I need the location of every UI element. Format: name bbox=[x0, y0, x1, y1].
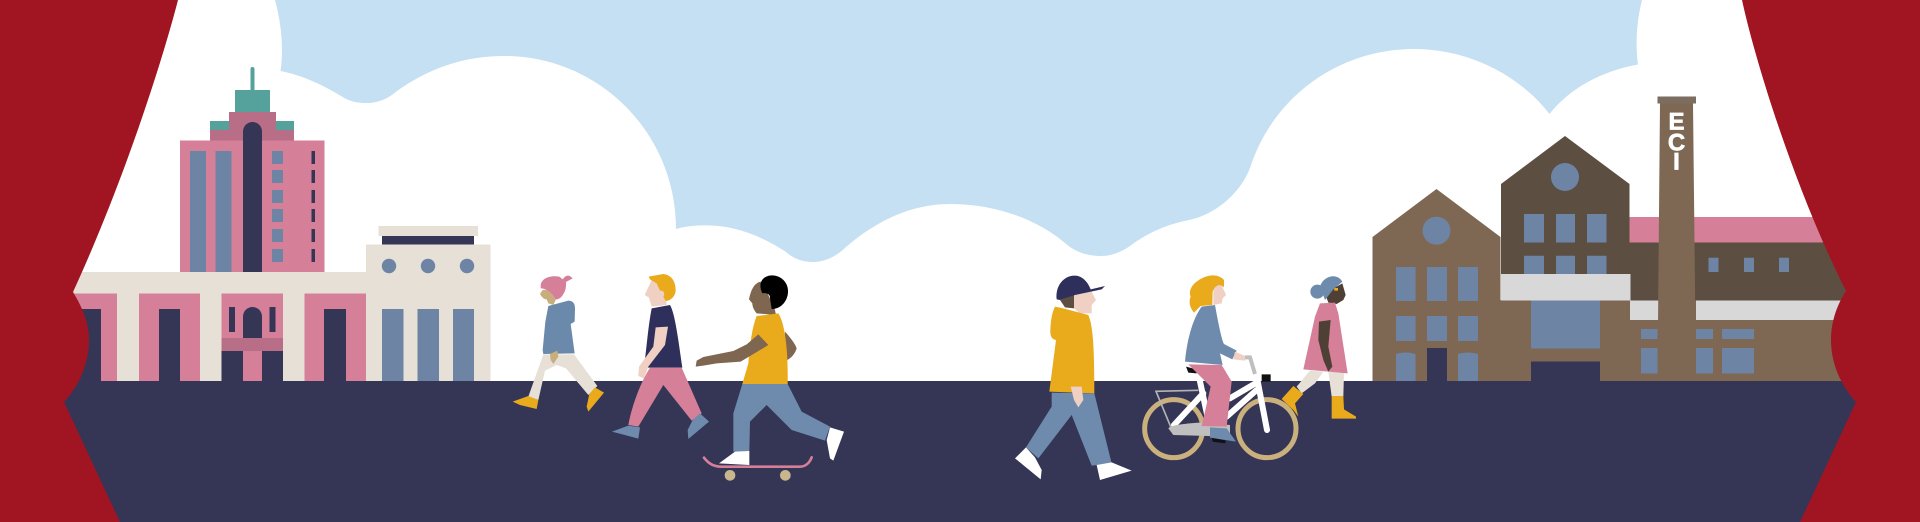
annex bbox=[366, 226, 490, 381]
curtain: right bbox=[1742, 0, 1920, 522]
rider bbox=[1185, 275, 1245, 442]
person: child with pink hair bbox=[513, 276, 604, 412]
chimney lettering: C bbox=[1668, 130, 1685, 156]
chimney lettering bbox=[1668, 108, 1685, 176]
person: walker in cap and yellow hoodie bbox=[1015, 276, 1132, 480]
dark gabled house bbox=[1501, 136, 1630, 381]
sky with cloud outline bbox=[275, 0, 1642, 262]
bicycle bbox=[1145, 357, 1296, 458]
chimney lettering: E bbox=[1668, 108, 1685, 136]
person: cyclist on bicycle bbox=[1145, 275, 1296, 458]
person: skateboarder bbox=[696, 275, 844, 481]
curtain: left bbox=[0, 0, 178, 522]
tower bbox=[180, 67, 324, 272]
chimney bbox=[1658, 96, 1696, 381]
ground bbox=[0, 381, 1920, 522]
skateboard bbox=[704, 457, 812, 481]
person: blond walker bbox=[612, 274, 709, 439]
long wing bbox=[1500, 217, 1870, 381]
building: pink tower and cream hall bbox=[60, 67, 490, 381]
hall bbox=[60, 272, 366, 381]
chimney lettering: I bbox=[1673, 148, 1680, 176]
building: brick factory with ECI chimney bbox=[1372, 96, 1870, 381]
person: woman in pink dress bbox=[1282, 276, 1356, 419]
left gabled house bbox=[1372, 189, 1500, 381]
